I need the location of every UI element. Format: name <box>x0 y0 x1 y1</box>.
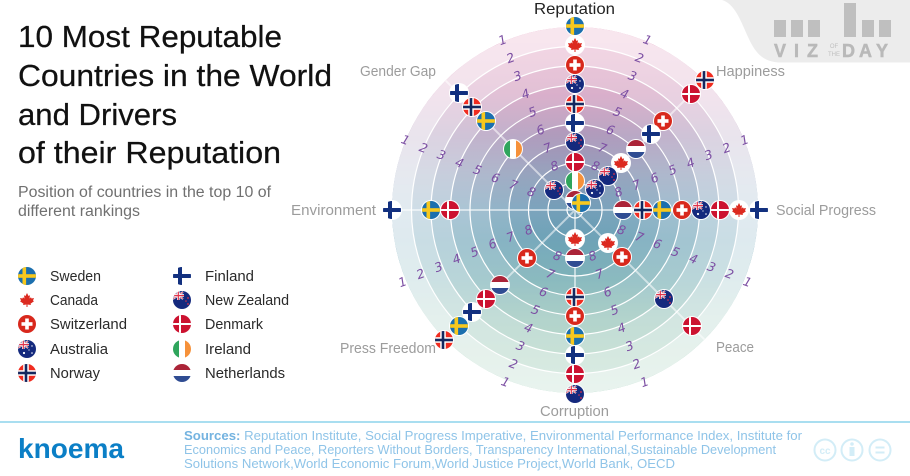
rank numbers: 6 <box>604 121 617 138</box>
rank numbers: 3 <box>705 258 718 275</box>
rank numbers: 6 <box>601 283 614 300</box>
legend: Ireland <box>205 342 251 358</box>
legend: Australia <box>50 342 109 358</box>
rank numbers: 8 <box>548 157 561 174</box>
rank numbers: 4 <box>453 154 466 171</box>
rank numbers: 2 <box>504 49 517 66</box>
logo: knoema: knoema <box>18 433 124 464</box>
subtitle <box>18 184 272 220</box>
rank numbers: 8 <box>551 247 564 264</box>
axis flags: Social Progress <box>613 200 769 220</box>
rank numbers: 8 <box>612 183 625 200</box>
badge: Viz of the Day: DAY <box>842 41 888 61</box>
rank numbers: 5 <box>608 301 621 318</box>
subtitle: Position of countries in the top 10 of <box>18 184 272 201</box>
axis flags: Happiness <box>585 70 715 199</box>
badge: Viz of the Day <box>722 0 910 62</box>
rank numbers: 5 <box>526 103 539 120</box>
badge: Viz of the Day: THE <box>828 52 840 58</box>
rank numbers: 3 <box>623 337 636 354</box>
title <box>18 19 332 170</box>
axis label: Press Freedom: Press Freedom <box>340 340 436 357</box>
rank numbers: 6 <box>537 283 550 300</box>
legend: Norway <box>50 366 101 382</box>
axis label: Reputation: Reputation <box>534 1 615 18</box>
axis label: Gender Gap: Gender Gap <box>360 63 436 80</box>
rank numbers: 4 <box>450 250 463 267</box>
icons: creative commons <box>814 440 890 460</box>
rank numbers: 1 <box>499 373 512 390</box>
rank numbers: 6 <box>651 235 664 252</box>
axis flags: Corruption <box>565 229 585 404</box>
sources: Sources: Reputation Institute, Social Progress Imperative, Environmental Performance Index, Institute for <box>184 428 803 443</box>
rank numbers: 7 <box>504 228 517 245</box>
sources <box>184 428 803 471</box>
legend: Finland <box>205 269 254 285</box>
rank numbers: 2 <box>633 49 646 66</box>
rank numbers: 2 <box>723 265 736 282</box>
sources: Solutions Network,World Economic Forum,World Justice Project,World Bank, OECD <box>184 456 675 471</box>
axis flags: Environment <box>382 200 460 220</box>
axis flags: Reputation <box>565 16 585 210</box>
rank numbers: 5 <box>611 103 624 120</box>
legend: Canada <box>50 293 99 309</box>
rank numbers: 5 <box>471 161 484 178</box>
rank numbers: 2 <box>630 355 643 372</box>
axis flags: Gender Gap <box>449 83 564 200</box>
title: and Drivers <box>18 97 177 132</box>
rank numbers: 3 <box>432 258 445 275</box>
rank numbers: 8 <box>525 183 538 200</box>
rank numbers: 5 <box>666 161 679 178</box>
rank numbers: 3 <box>702 146 715 163</box>
rank numbers: 7 <box>593 265 606 282</box>
legend <box>17 266 289 383</box>
rank numbers: 6 <box>648 169 661 186</box>
icons: creative commons: cc <box>819 446 831 457</box>
rank numbers: 5 <box>468 243 481 260</box>
radar chart disc <box>392 27 758 393</box>
rank numbers: 1 <box>741 273 754 290</box>
axis flags: Press Freedom <box>434 248 537 350</box>
rank numbers: 1 <box>399 131 412 148</box>
rank numbers: 8 <box>615 221 628 238</box>
rank numbers: 7 <box>541 139 554 156</box>
rank numbers: 8 <box>522 221 535 238</box>
rank numbers: 1 <box>641 31 654 48</box>
rank numbers: 7 <box>596 139 609 156</box>
legend: New Zealand <box>205 293 289 309</box>
axis label: Environment: Environment <box>291 202 377 219</box>
rank numbers: 7 <box>633 228 646 245</box>
axis label: Corruption: Corruption <box>540 403 609 420</box>
rank numbers: 4 <box>687 250 700 267</box>
rank numbers: 2 <box>720 139 733 156</box>
rank numbers: 3 <box>514 337 527 354</box>
rank numbers: 1 <box>496 31 509 48</box>
rank numbers: 6 <box>489 169 502 186</box>
subtitle: different rankings <box>18 203 140 220</box>
rank numbers: 1 <box>638 373 651 390</box>
title: of their Reputation <box>18 135 281 170</box>
axis label: Peace: Peace <box>716 339 754 356</box>
legend: Sweden <box>50 269 101 285</box>
rank numbers: 5 <box>669 243 682 260</box>
rank numbers: 3 <box>511 67 524 84</box>
rank numbers: 4 <box>684 154 697 171</box>
rank numbers: 7 <box>630 176 643 193</box>
rank numbers: 3 <box>626 67 639 84</box>
axis label: Happiness: Happiness <box>716 63 785 80</box>
rank numbers: 1 <box>738 131 751 148</box>
rank numbers: 4 <box>615 319 628 336</box>
rank numbers: 7 <box>544 265 557 282</box>
rank numbers: 8 <box>586 247 599 264</box>
rank numbers: 3 <box>435 146 448 163</box>
footer rule <box>0 421 910 423</box>
axis label: Social Progress: Social Progress <box>776 202 876 219</box>
title: Countries in the World <box>18 58 332 93</box>
rank numbers: 6 <box>486 235 499 252</box>
axis flags: Peace <box>598 233 702 336</box>
rank numbers: 6 <box>534 121 547 138</box>
rank numbers: 4 <box>519 85 532 102</box>
rank numbers: 5 <box>529 301 542 318</box>
rank numbers: 8 <box>589 157 602 174</box>
rank numbers: 2 <box>507 355 520 372</box>
flag: Sweden at centre of Happiness axis <box>571 193 591 213</box>
title: 10 Most Reputable <box>18 19 282 54</box>
rank numbers: 1 <box>396 273 409 290</box>
legend: Denmark <box>205 317 264 333</box>
legend: Switzerland <box>50 317 127 333</box>
legend: Netherlands <box>205 366 285 382</box>
rank numbers <box>396 31 754 390</box>
badge: Viz of the Day: OF <box>830 44 838 50</box>
rank numbers: 2 <box>414 265 427 282</box>
rank numbers: 4 <box>522 319 535 336</box>
rank numbers: 7 <box>507 176 520 193</box>
rank numbers: 4 <box>618 85 631 102</box>
rank numbers: 2 <box>417 139 430 156</box>
badge: Viz of the Day: VIZ <box>774 41 818 61</box>
sources: Economics and Peace, Reporters Without Borders, Transparency International,Sustainable Development <box>184 442 776 457</box>
